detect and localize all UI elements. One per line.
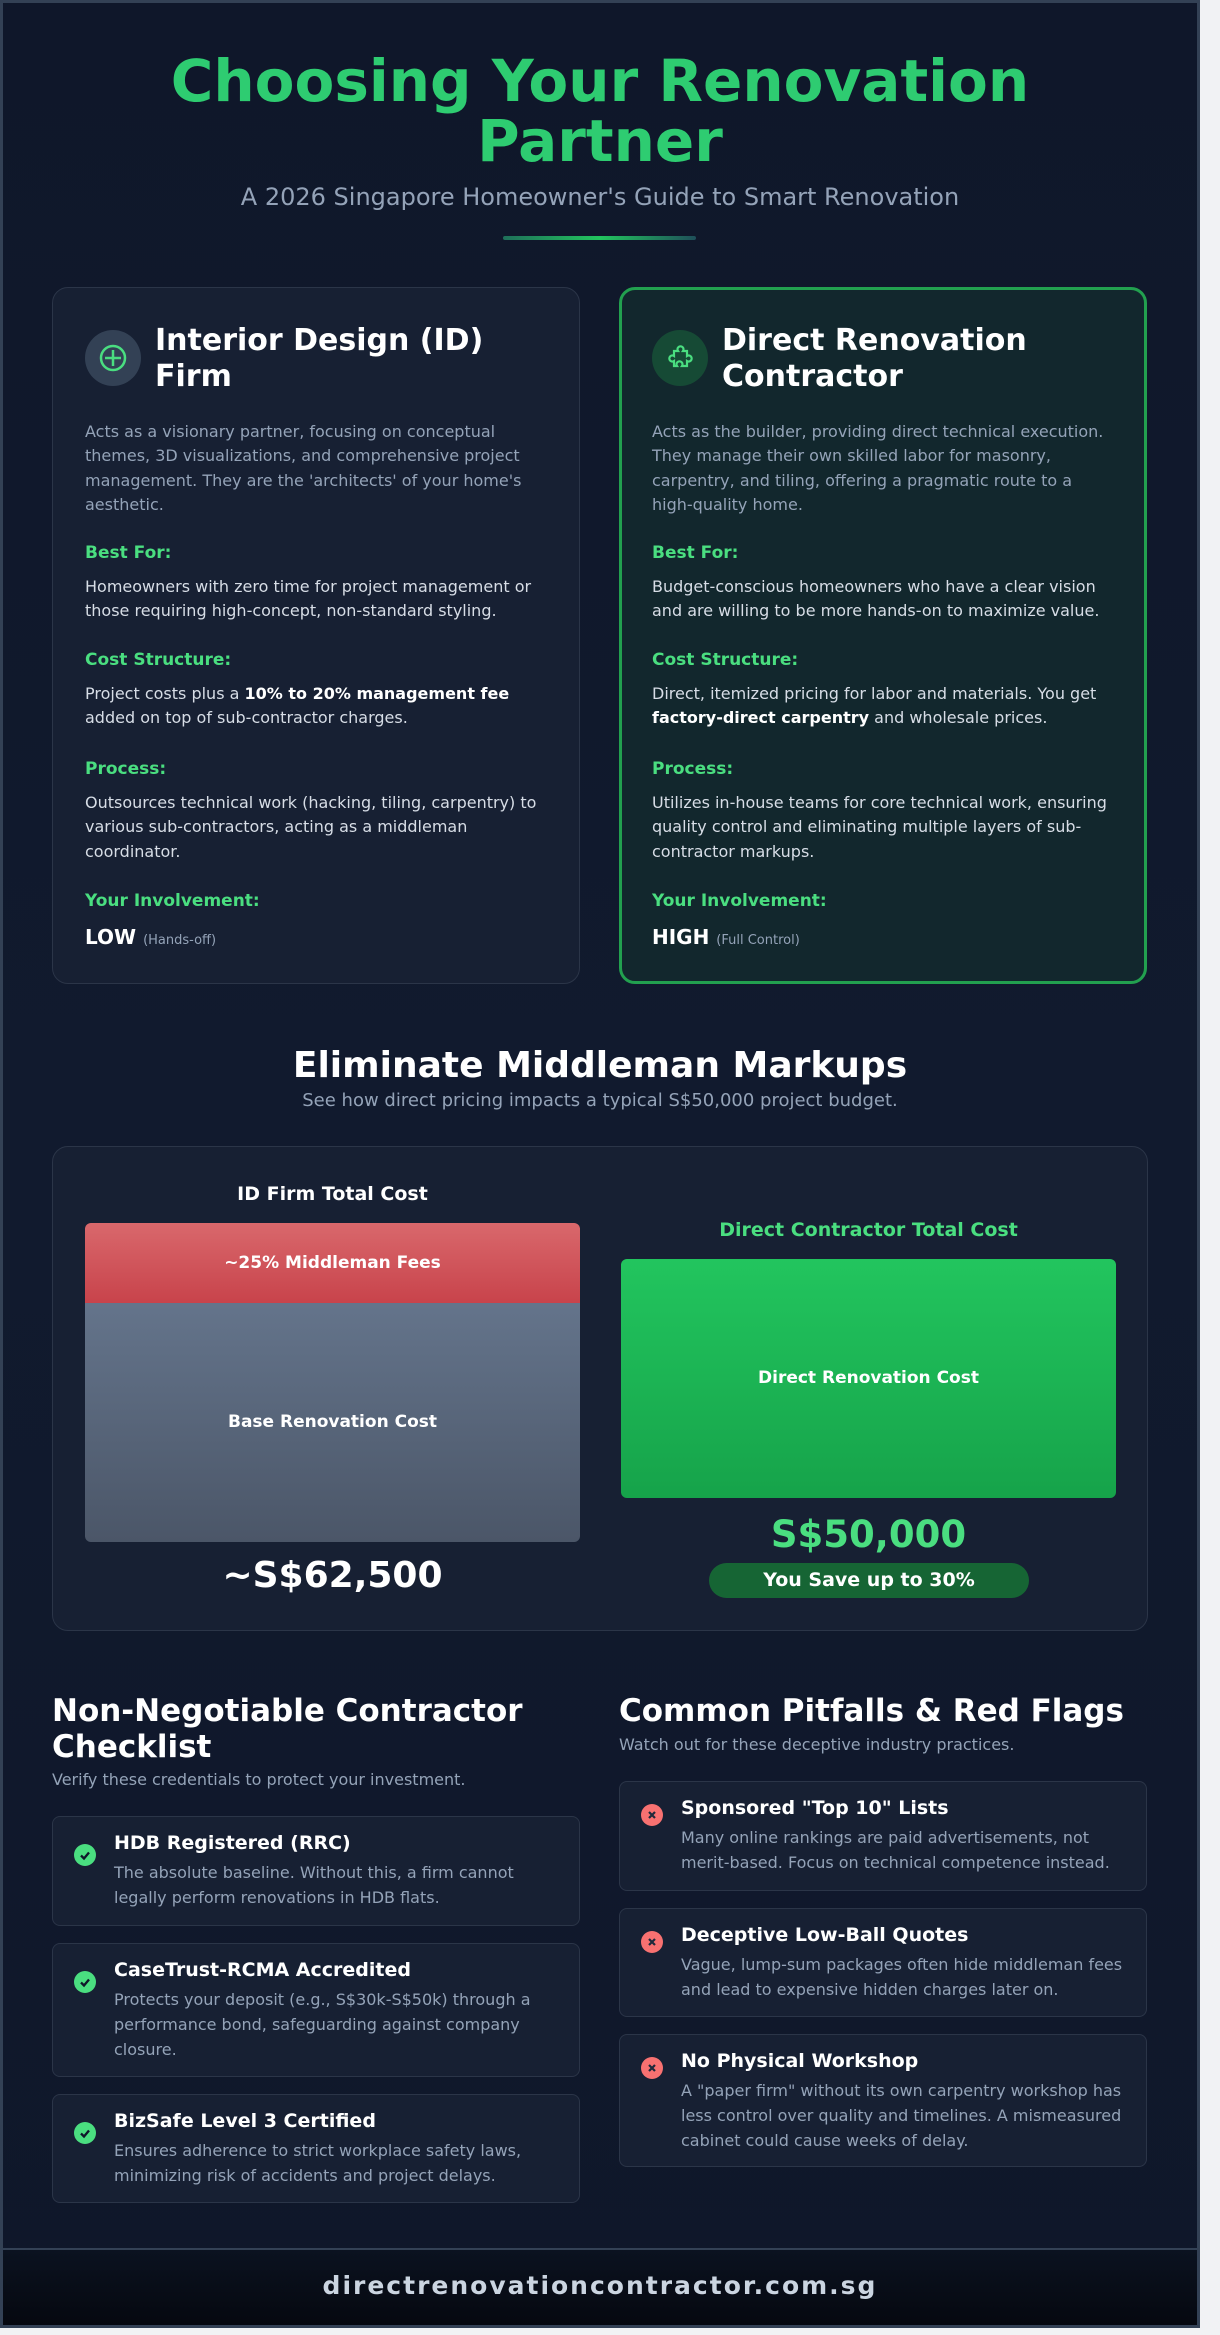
- heading: checklist: Non-Negotiable Contractor: [52, 1693, 523, 1729]
- panel: cost comparison chart: [52, 1146, 1148, 1631]
- bar: direct cost: Direct Renovation Cost: [758, 1368, 979, 1388]
- heading: checklist: [52, 1693, 523, 1765]
- title: Choosing Your Renovation: [171, 47, 1029, 115]
- subtitle: pitfalls: Watch out for these deceptive industry practices.: [619, 1735, 1014, 1754]
- icon: x: [641, 2057, 663, 2079]
- pitfall item 3: [619, 2034, 1147, 2167]
- value: direct total: S$50,000: [771, 1513, 966, 1556]
- checklist item 1: The absolute baseline. Without this, a firm cannot legally perform renovations in HDB flats.: [114, 1863, 514, 1907]
- heading: checklist: Checklist: [52, 1729, 211, 1765]
- bar segment: base cost: Base Renovation Cost: [228, 1412, 437, 1432]
- pitfall item 2: [619, 1908, 1147, 2017]
- heading: Interior Design (ID): [155, 323, 483, 358]
- checklist item 3: BizSafe Level 3 Certified: [114, 2110, 376, 2132]
- checklist item 3: [52, 2094, 580, 2203]
- section heading: markups: Eliminate Middleman Markups: [293, 1045, 907, 1086]
- section subtitle: See how direct pricing impacts a typical S$50,000 project budget.: [302, 1090, 898, 1111]
- pitfall item 2: Vague, lump-sum packages often hide middleman fees and lead to expensive hidden charges later on.: [681, 1955, 1122, 1999]
- icon: x: [641, 1931, 663, 1953]
- stacked bar: ID firm: [85, 1223, 580, 1542]
- pitfall item 1: Many online rankings are paid advertisements, not merit-based. Focus on technical competence instead.: [681, 1828, 1110, 1872]
- label involvement: Your Involvement:: [85, 891, 260, 911]
- involvement value: LOW (Hands-off): [85, 925, 216, 949]
- label process: Process:: [652, 759, 733, 779]
- panel: ID firm: [52, 287, 580, 984]
- icon: puzzle: [652, 330, 708, 386]
- panel: direct contractor: [619, 287, 1147, 984]
- badge: savings: [709, 1563, 1029, 1598]
- heading: Contractor: [722, 359, 903, 394]
- title: [171, 47, 1029, 175]
- heading: [155, 323, 483, 394]
- icon: plus circle: [85, 330, 141, 386]
- icon: check: [74, 2122, 96, 2144]
- footer: directrenovationcontractor.com.sg: [323, 2271, 877, 2300]
- bar segment: base cost: [85, 1303, 580, 1542]
- bar segment: middleman fees: ~25% Middleman Fees: [224, 1253, 441, 1273]
- description: Acts as the builder, providing direct technical execution. They manage their own skilled labor for masonry, carpentry, and tiling, offering a pragmatic route to a high-quality home.: [652, 422, 1103, 514]
- pitfall item 3: No Physical Workshop: [681, 2050, 918, 2072]
- value: ID total: ~S$62,500: [222, 1555, 443, 1596]
- label involvement: Your Involvement:: [652, 891, 827, 911]
- heading: pitfalls: Common Pitfalls & Red Flags: [619, 1693, 1124, 1729]
- label cost: Cost Structure:: [85, 650, 231, 670]
- heading: Direct Renovation: [722, 323, 1027, 358]
- heading: Firm: [155, 359, 232, 394]
- description: Acts as a visionary partner, focusing on conceptual themes, 3D visualizations, and comprehensive project management. They are the 'architects' of your home's aesthetic.: [85, 422, 521, 514]
- icon: x: [641, 1804, 663, 1826]
- checklist item 3: Ensures adherence to strict workplace safety laws, minimizing risk of accidents and project delays.: [114, 2141, 521, 2185]
- subtitle: checklist: Verify these credentials to protect your investment.: [52, 1770, 466, 1789]
- checklist item 2: Protects your deposit (e.g., S$30k-S$50k) through a performance bond, safeguarding against company closure.: [114, 1990, 531, 2059]
- icon: check: [74, 1844, 96, 1866]
- bar segment: middleman fees: [85, 1223, 580, 1303]
- cost text: Project costs plus a 10% to 20% management fee added on top of sub-contractor charges.: [85, 684, 509, 727]
- pitfall item 1: Sponsored "Top 10" Lists: [681, 1797, 949, 1819]
- title: Partner: [477, 107, 723, 175]
- best for text: Budget-conscious homeowners who have a clear vision and are willing to be more hands-on to maximize value.: [652, 577, 1099, 620]
- label best for: Best For:: [85, 543, 171, 563]
- label process: Process:: [85, 759, 166, 779]
- pitfall item 2: Deceptive Low-Ball Quotes: [681, 1924, 968, 1946]
- bar: direct cost: [621, 1259, 1116, 1498]
- process text: Utilizes in-house teams for core technical work, ensuring quality control and eliminating multiple layers of sub-contractor markups.: [652, 793, 1107, 861]
- best for text: Homeowners with zero time for project management or those requiring high-concept, non-standard styling.: [85, 577, 531, 620]
- subtitle: A 2026 Singapore Homeowner's Guide to Smart Renovation: [241, 183, 959, 211]
- pitfall item 1: [619, 1781, 1147, 1891]
- cost text: Direct, itemized pricing for labor and materials. You get factory-direct carpentry and wholesale prices.: [652, 684, 1096, 727]
- pitfall item 3: A "paper firm" without its own carpentry workshop has less control over quality and timelines. A mismeasured cabinet could cause weeks of delay.: [681, 2081, 1121, 2150]
- involvement value: HIGH (Full Control): [652, 925, 800, 949]
- badge: savings: You Save up to 30%: [763, 1569, 975, 1591]
- label best for: Best For:: [652, 543, 738, 563]
- label: ID firm total: ID Firm Total Cost: [237, 1183, 428, 1205]
- checklist item 2: [52, 1943, 580, 2077]
- checklist item 1: [52, 1816, 580, 1926]
- heading: [722, 323, 1027, 394]
- footer: [3, 2248, 1197, 2328]
- icon: check: [74, 1971, 96, 1993]
- label: direct total: Direct Contractor Total Cost: [719, 1219, 1018, 1241]
- process text: Outsources technical work (hacking, tiling, carpentry) to various sub-contractors, acting as a middleman coordinator.: [85, 793, 536, 861]
- label cost: Cost Structure:: [652, 650, 798, 670]
- checklist item 2: CaseTrust-RCMA Accredited: [114, 1959, 411, 1981]
- checklist item 1: HDB Registered (RRC): [114, 1832, 351, 1854]
